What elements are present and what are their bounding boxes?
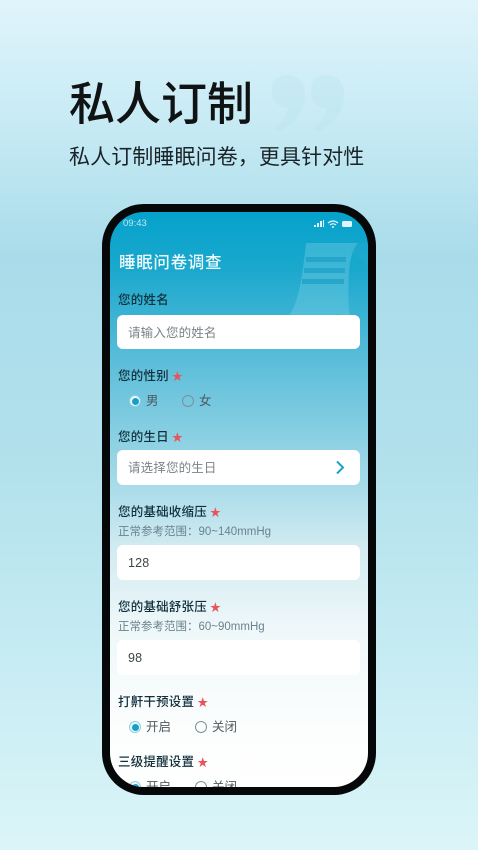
snore intervention field [118,695,237,734]
input: 128 [128,556,149,570]
hint: 正常参考范围：60~90mmHg [118,621,265,633]
radio female [182,395,194,407]
radio on [129,781,141,793]
phone screen [110,212,368,787]
decorative quotation mark [270,72,346,134]
option male: 男 [146,394,159,408]
option female: 女 [199,394,212,408]
status bar icons [314,220,352,228]
decorative paper scroll [290,243,368,315]
input: 请选择您的生日 [128,461,217,475]
title: 私人订制 [69,78,253,130]
option off: 关闭 [212,720,237,734]
status bar time: 09:43 [123,218,147,229]
input [117,545,360,580]
input [117,450,360,485]
option on: 开启 [146,720,171,734]
systolic field [117,505,360,580]
birthday field [117,430,360,485]
label: 三级提醒设置 ★ [118,755,208,769]
label: 您的姓名 [118,293,169,307]
subtitle: 私人订制睡眠问卷，更具针对性 [69,146,364,169]
radio off [195,721,207,733]
label: 打鼾干预设置 ★ [118,695,208,709]
tertiary reminder field [118,755,237,787]
input [117,315,360,349]
diastolic field [117,600,360,675]
label: 您的基础收缩压 ★ [118,505,221,519]
label: 您的性别 ★ [118,369,183,383]
hint: 正常参考范围：90~140mmHg [118,526,271,538]
radio off [195,781,207,793]
name field [117,293,360,349]
input [117,640,360,675]
label: 您的生日 ★ [118,430,183,444]
radio male [129,395,141,407]
screen heading: 睡眠问卷调查 [119,254,222,272]
chevron [336,460,344,474]
radio on [129,721,141,733]
input: 请输入您的姓名 [128,326,217,340]
label: 您的基础舒张压 ★ [118,600,221,614]
input: 98 [128,651,142,665]
gender field [118,369,212,408]
phone mockup [102,204,376,795]
